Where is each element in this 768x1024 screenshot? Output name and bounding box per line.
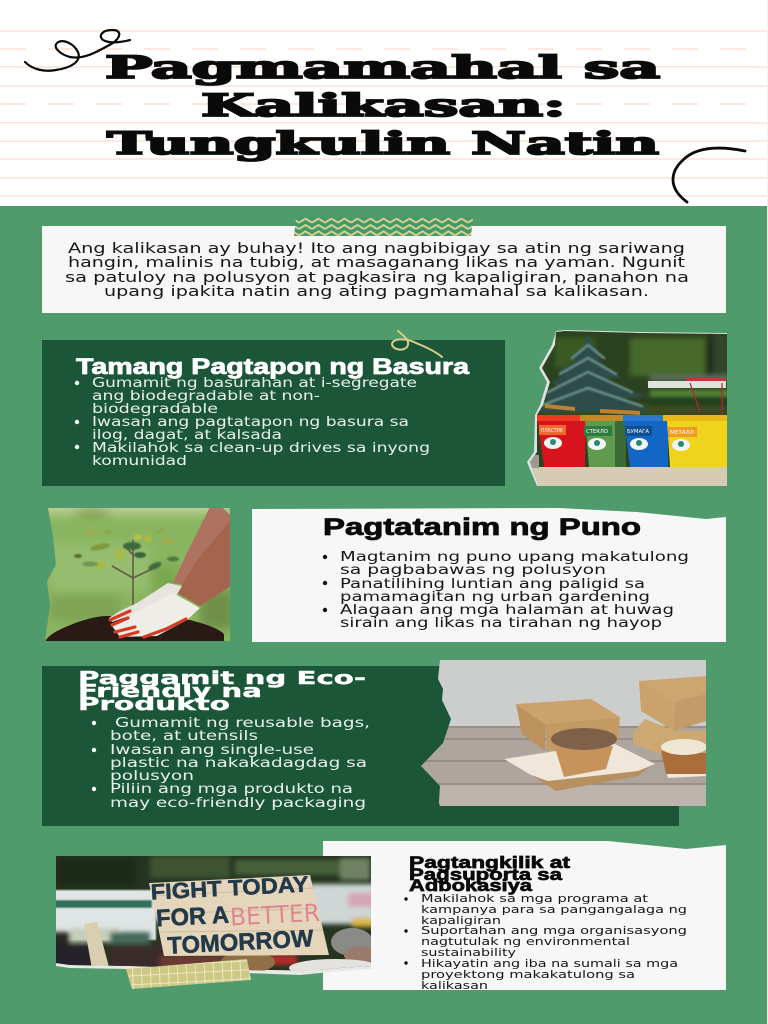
bullet list: ilog, dagat, at kalsada [92,428,282,443]
panel: introduction [42,226,726,313]
paper tray [504,744,655,791]
seedling [74,527,179,610]
spruce tree [530,335,652,412]
arms [173,507,231,585]
green bin: СТЕКЛО [586,429,608,435]
bullet list: sa pagbabawas ng polusyon [340,562,606,578]
panel: Tamang Pagtapon ng Basura [42,340,505,486]
protest placard: TOMORROW [167,925,314,960]
bullet list: kampanya para sa pangangalaga ng [421,904,687,916]
gloves [109,583,182,622]
bullet list: sustainability [421,947,516,959]
intro text [65,241,689,300]
bullet list [323,549,689,631]
icon: black swirl decoration [25,30,130,71]
bullet list: may eco-friendly packaging [110,796,366,811]
title [105,49,660,161]
small cup [661,739,707,778]
heading [78,668,366,715]
panel: Pagtatanim ng Puno [252,508,726,642]
protest placard: FOR A [155,902,230,932]
intro text: upang ipakita natin ang ating pagmamahal sa kalikasan. [104,284,649,300]
red bin [536,415,586,467]
heading: Pagsuporta sa [409,865,563,884]
bullet list: Gumamit ng reusable bags, [115,716,370,731]
blue bin [623,415,669,467]
bullet list: Makilahok sa mga programa at [421,893,648,905]
protest placard: BETTER [229,899,321,932]
protest placard: FIGHT TODAY [150,871,309,905]
bullet list: Gumamit ng basurahan at i-segregate [92,376,417,391]
small placard [84,922,109,969]
bullet list: Iwasan ang pagtatapon ng basura sa [92,415,409,430]
title: Kalikasan: [201,87,566,123]
bullet list: Iwasan ang single-use [110,743,314,758]
panel: Pagtangkilik at Pagsuporta sa Adbokasiya [323,841,726,992]
bullet list: Alagaan ang mga halaman at huwag [340,602,674,618]
bullet list: plastic na nakakadagdag sa [110,756,367,771]
grid washi tape [126,959,251,989]
heading: Paggamit ng Eco- [78,668,366,689]
intro text: sa patuloy na polusyon at pagkasira ng kapaligiran, panahon na [65,270,689,286]
icon: black arc decoration [673,148,745,202]
bullet list: kapaligiran [421,915,501,927]
title: Tungkulin Natin [107,125,659,161]
panel: Paggamit ng Eco-Friendly na Produkto [42,666,679,826]
photo: eco-friendly kraft packaging [418,658,708,808]
bullet list: pamamagitan ng urban gardening [340,589,650,605]
icon: cream squiggle [392,331,442,357]
photo: protest sign [50,854,381,977]
bullet list [92,716,370,811]
soil [45,616,224,642]
red bin: ПЛАСТИК [541,428,563,434]
bullet list: Hikayatin ang iba na sumali sa mga [421,958,678,970]
bullet list: kalikasan [421,980,488,992]
photo: recycling bins in a park [525,325,730,490]
blue bin: БУМАГА [627,429,650,435]
yellow bin: МЕТАЛЛ [670,430,694,436]
heading: Pagtatanim ng Puno [323,514,641,541]
bullet list: Piliin ang mga produkto na [110,782,353,797]
bullet list: bote, at utensils [110,729,258,744]
heading: Adbokasiya [409,876,533,895]
bullet list: nagtutulak ng environmental [421,936,630,948]
washi tape [294,218,473,236]
bullet list [75,376,430,469]
protest placard [149,871,329,961]
bullet list: Magtanim ng puno upang makatulong [340,549,689,565]
heading [409,853,570,895]
heading: Produkto [78,694,230,715]
bullet list: Panatilihing luntian ang paligid sa [340,576,645,592]
photo: hands planting a seedling [45,508,230,641]
bullet list: komunidad [92,454,187,469]
bullet list: biodegradable [92,402,218,417]
bullet list: proyektong makakatulong sa [421,969,635,981]
heading: Pagtangkilik at [409,853,570,872]
kraft boxes right [633,676,706,754]
yellow bin [663,415,727,467]
bullet list: Makilahok sa clean-up drives sa inyong [92,441,430,456]
bullet list [404,893,687,992]
bullet list: polusyon [110,769,194,784]
intro text: hangin, malinis na tubig, at masaganang likas na yaman. Ngunit [68,255,686,271]
green bin [580,415,628,467]
paper cup [551,728,617,777]
bullet list: sirain ang likas na tirahan ng hayop [340,615,662,631]
bullet list: ang biodegradable at non- [92,389,320,404]
heading: Friendly na [78,681,262,702]
title: Pagmamahal sa [105,49,660,85]
heading: Tamang Pagtapon ng Basura [76,354,470,379]
kraft box left [516,699,620,751]
bullet list: Suportahan ang mga organisasyong [421,925,687,937]
header background with ruled lines [0,0,768,206]
intro text: Ang kalikasan ay buhay! Ito ang nagbibigay sa atin ng sariwang [68,241,685,257]
